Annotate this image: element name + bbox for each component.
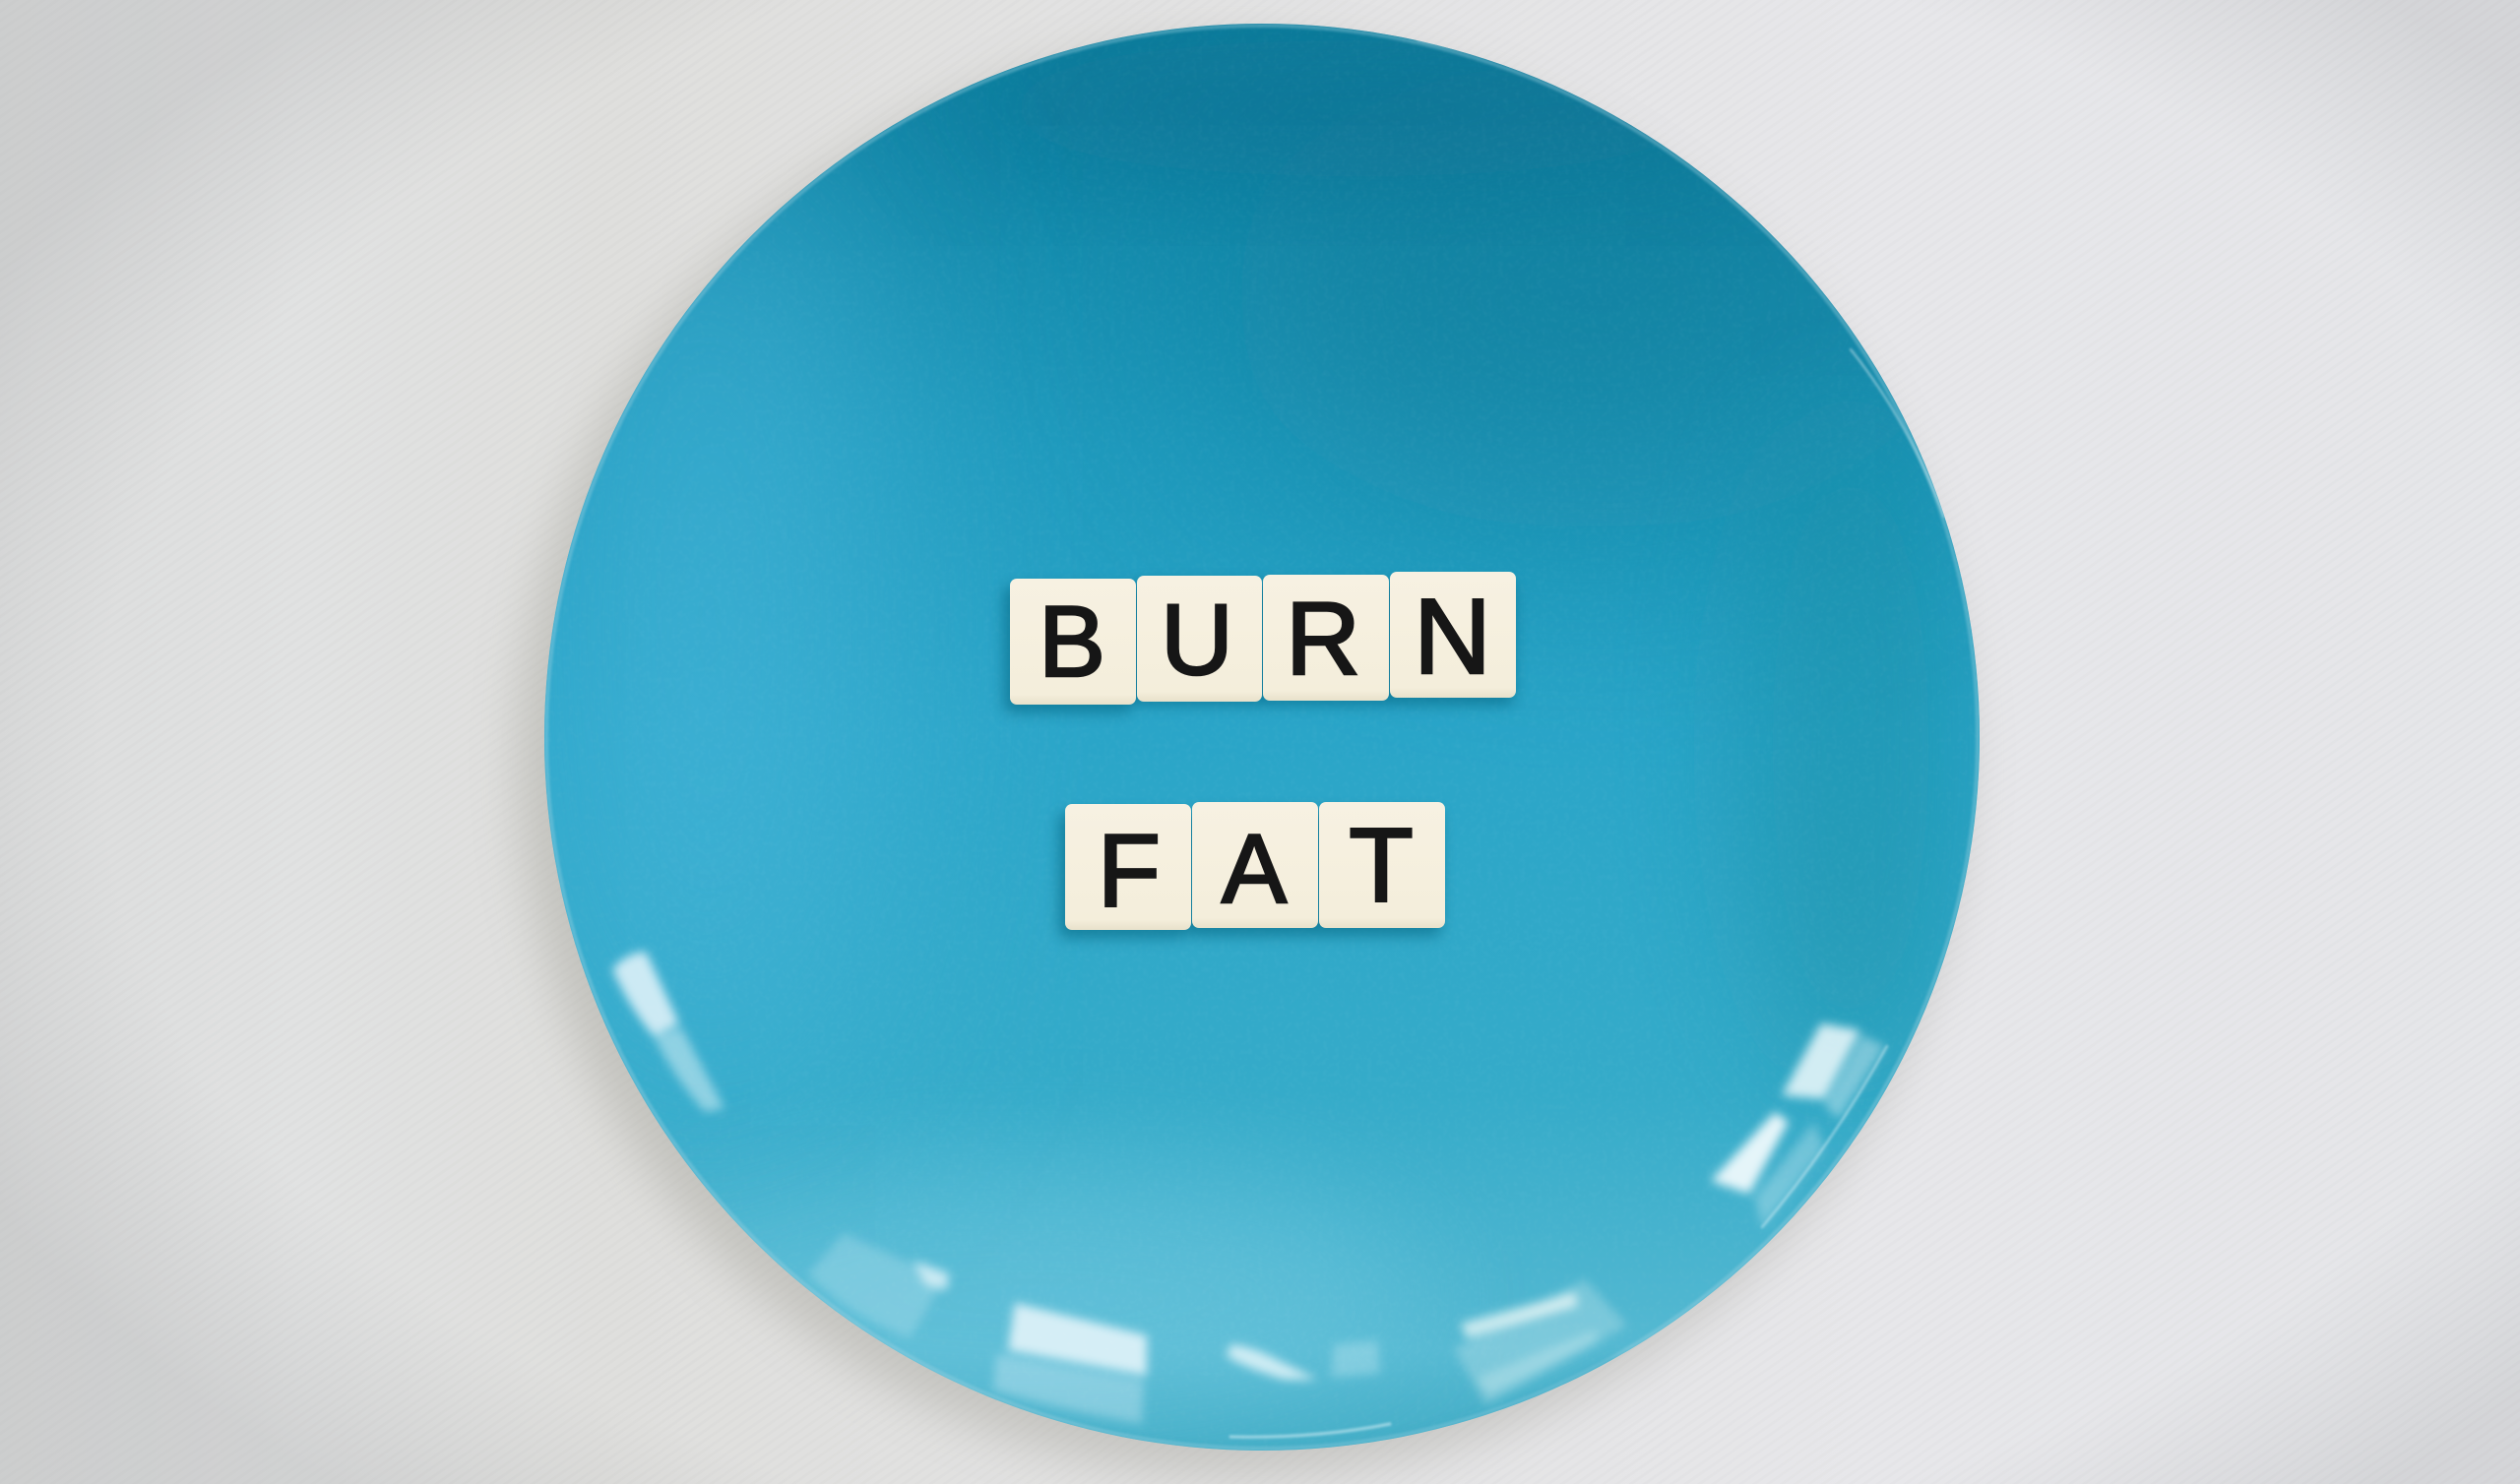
tile: R: R bbox=[1286, 582, 1360, 697]
rim edge bbox=[546, 26, 1978, 1449]
highlight: rim glints bbox=[984, 39, 1944, 1447]
tile word: BURN bbox=[1010, 572, 1516, 705]
plate shading bbox=[544, 24, 1980, 1451]
plate body bbox=[544, 24, 1980, 1451]
tile: N bbox=[1390, 572, 1516, 698]
tile: R bbox=[1263, 575, 1389, 701]
highlight: bottom centre reflections bbox=[993, 1303, 1380, 1424]
tile: N: N bbox=[1414, 577, 1491, 697]
tile: B: B bbox=[1039, 586, 1105, 698]
blue plate bbox=[544, 24, 1980, 1451]
tile: A: A bbox=[1222, 814, 1287, 923]
highlight: right reflection bbox=[1711, 1023, 1885, 1227]
tile: T: T bbox=[1349, 806, 1414, 924]
tile: F bbox=[1065, 804, 1191, 930]
highlight: bottom right reflection bbox=[1454, 1279, 1627, 1405]
tile: T bbox=[1319, 802, 1445, 928]
tile: B bbox=[1010, 579, 1136, 705]
tile: A bbox=[1192, 802, 1318, 928]
tile: U: U bbox=[1161, 584, 1233, 696]
tile: U bbox=[1137, 576, 1262, 702]
tile: F: F bbox=[1098, 814, 1161, 929]
highlight: bottom left reflection bbox=[808, 1233, 949, 1338]
tile shadows bbox=[1004, 583, 1514, 938]
plate shadow bbox=[518, 43, 1967, 1476]
tile word: FAT bbox=[1065, 802, 1445, 930]
highlight: left reflection bbox=[612, 952, 724, 1112]
